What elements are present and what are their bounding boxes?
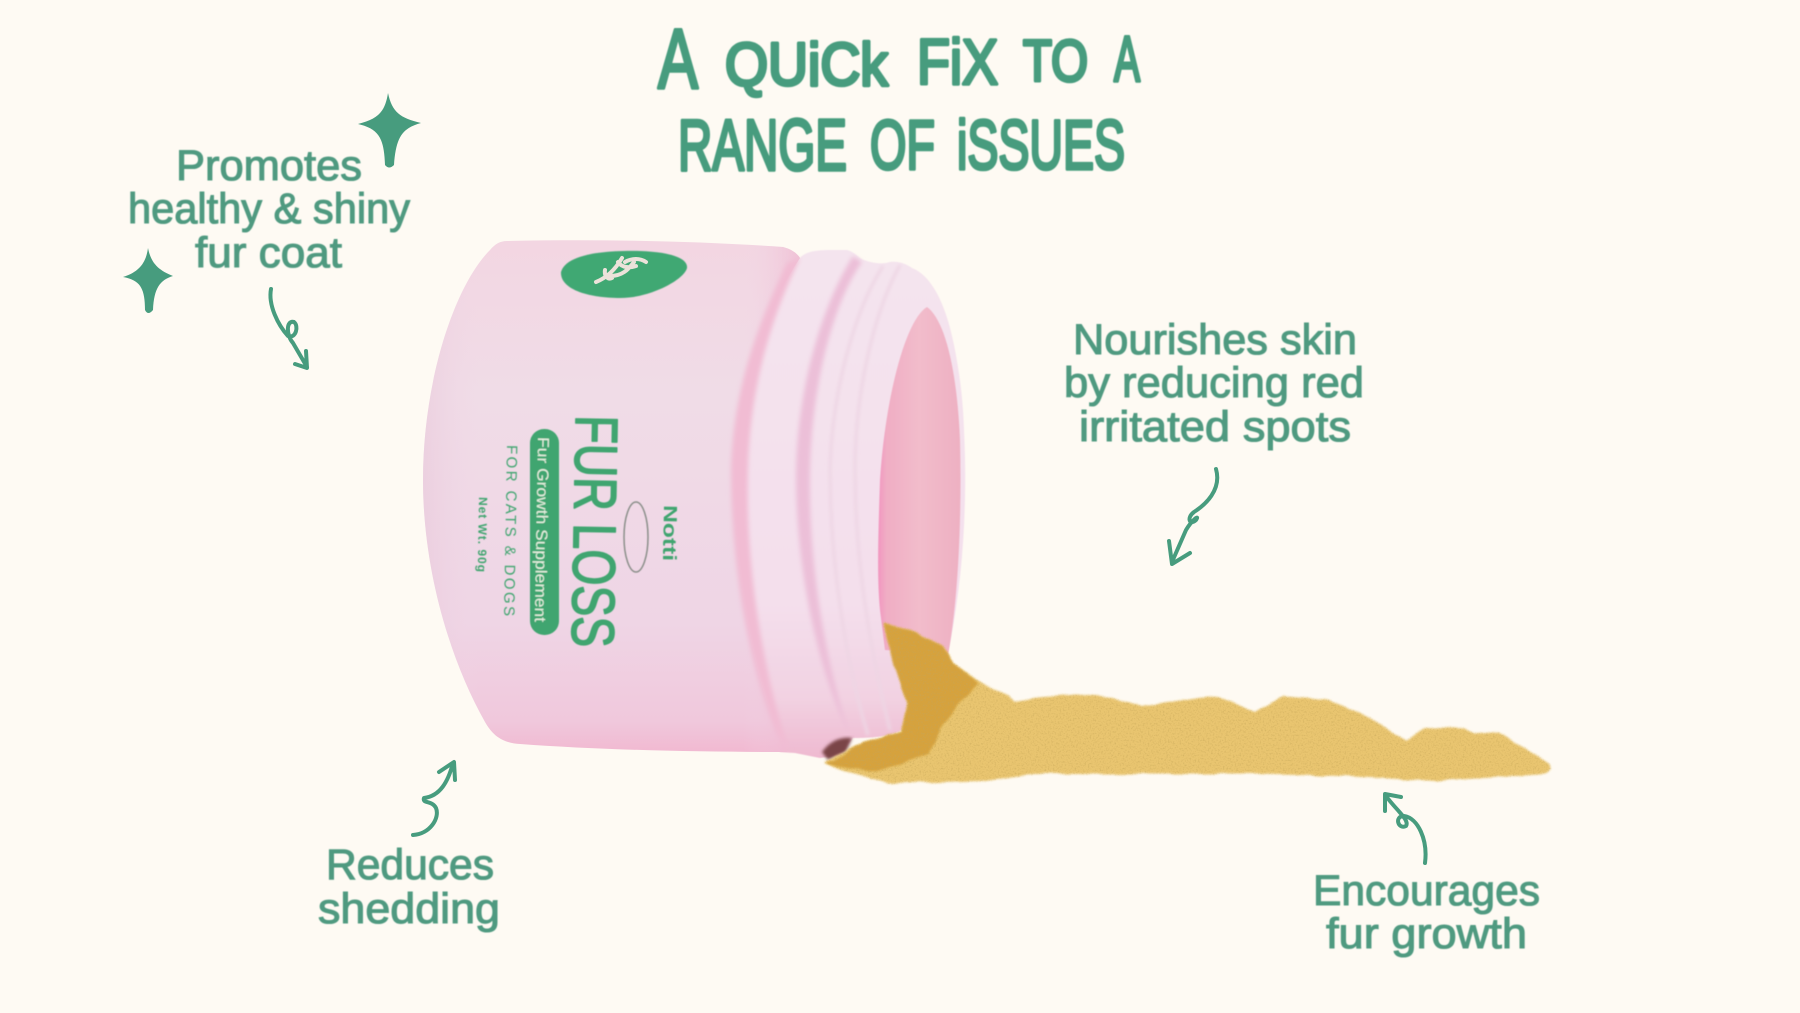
arrow: nourishes <box>1169 469 1217 564</box>
net weight: Net Wt. 90g <box>475 497 490 572</box>
jar lid badge <box>561 251 687 298</box>
text: promotes healthy and shiny fur coat: Promotes <box>176 142 362 190</box>
jar label <box>475 415 680 648</box>
powder dark pile <box>828 625 977 770</box>
collar to thread groove <box>796 256 862 735</box>
text: reduces shedding: shedding <box>318 885 500 933</box>
text: nourishes skin: irritated spots <box>1079 403 1351 451</box>
text: nourishes skin: by reducing red <box>1064 359 1364 407</box>
powder light pile <box>826 625 1550 782</box>
pill text: Fur Growth Supplement <box>531 437 551 623</box>
green pill <box>530 429 559 635</box>
small oval stamp <box>624 502 648 572</box>
text: reduces shedding <box>318 841 500 933</box>
jar body side shading <box>423 240 800 752</box>
text: encourages fur growth: fur growth <box>1326 910 1527 958</box>
title: TO <box>1023 29 1088 94</box>
text: encourages fur growth: Encourages <box>1313 867 1540 915</box>
badge squiggle <box>596 258 646 282</box>
arrow: encourages <box>1385 794 1426 863</box>
text: promotes healthy and shiny fur coat <box>128 142 410 277</box>
title: iSSUES <box>957 106 1125 184</box>
title: OF <box>870 106 935 184</box>
brand name: Notti <box>658 505 680 561</box>
title: FiX <box>917 26 998 98</box>
jar rim and threads silhouette <box>730 247 965 758</box>
text: promotes healthy and shiny fur coat: fur coat <box>195 229 342 277</box>
jar <box>423 240 965 760</box>
title: A <box>658 12 698 106</box>
title <box>658 12 1140 186</box>
text: encourages fur growth <box>1313 867 1540 958</box>
jar body <box>423 240 800 752</box>
thread lines <box>830 265 900 735</box>
jar opening <box>878 307 960 655</box>
text: reduces shedding: Reduces <box>326 841 494 889</box>
text: nourishes skin: Nourishes skin <box>1073 316 1357 364</box>
for cats and dogs: FOR CATS & DOGS <box>500 445 520 616</box>
text: nourishes skin <box>1064 316 1364 451</box>
arrow: promotes <box>270 289 307 368</box>
product name: FUR LOSS <box>559 415 630 648</box>
title: RANGE <box>678 106 847 186</box>
icon: large sparkle <box>358 93 421 168</box>
title: A <box>1114 23 1140 95</box>
text: promotes healthy and shiny fur coat: healthy & shiny <box>128 185 410 233</box>
icon: small sparkle <box>123 248 173 313</box>
title: QUiCk <box>725 31 889 98</box>
arrow: reduces <box>413 762 455 835</box>
body to collar groove <box>731 258 800 752</box>
powder spill <box>826 625 1550 782</box>
inner rim shadow <box>822 738 852 760</box>
